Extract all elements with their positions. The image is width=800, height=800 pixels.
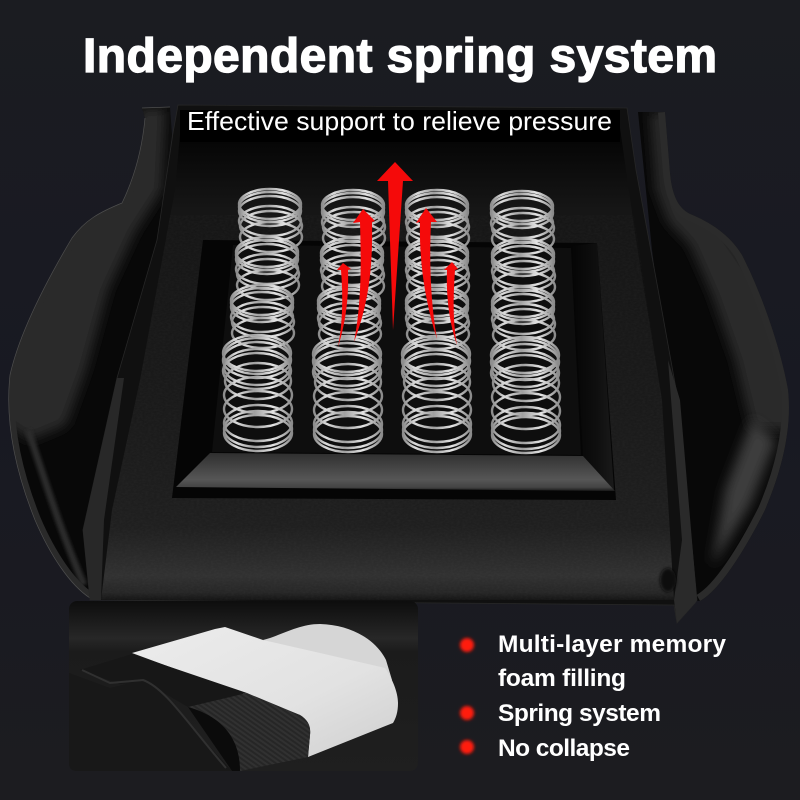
arrow: left small [337,263,351,347]
seat cushion illustration [0,100,800,623]
left side panel [69,673,232,771]
title: Independent spring system [83,30,717,83]
spring row 3 [231,285,555,350]
subtitle band [180,110,620,142]
bullet: spring system: Spring system [498,700,661,727]
tray front face [176,453,615,491]
spring row 2 [236,237,555,302]
dark side wedge [188,707,240,771]
left ridge highlight [82,670,226,768]
left side band [83,378,124,600]
bullet: no collapse: No collapse [498,735,630,762]
bullet: multi-layer memory foam: foam filling [498,665,626,692]
left bolster outline [9,107,170,598]
shaded corner [660,568,676,592]
arrow: right large [416,208,437,339]
feature list [460,631,726,762]
white foam layer [132,627,398,757]
arrow: left large [353,209,375,342]
back white bump [263,624,392,680]
left bolster [9,108,172,596]
arrow: right small [444,262,458,345]
inset panel: foam cross-section [69,601,418,771]
red pressure arrows [337,162,458,347]
dark top cover [80,654,247,707]
right side band [668,360,697,623]
seat frame [83,105,697,623]
tray opening [212,245,581,455]
spring array [223,189,560,453]
spring row 1 [239,189,554,254]
tray right bevel [572,243,614,490]
right bolster [638,112,789,601]
bullet: multi-layer memory foam: Multi-layer memory [498,631,726,658]
inset background [69,601,418,771]
tray [172,240,616,500]
leather grain [101,215,674,600]
bullet: multi-layer memory foam [460,631,726,692]
arrow: centre [377,162,413,330]
tray outer frame [172,240,616,500]
carbon fibre side [188,693,310,771]
spring row 4 [223,335,560,453]
seat surface [101,112,674,600]
subtitle: Effective support to relieve pressure [187,106,612,136]
